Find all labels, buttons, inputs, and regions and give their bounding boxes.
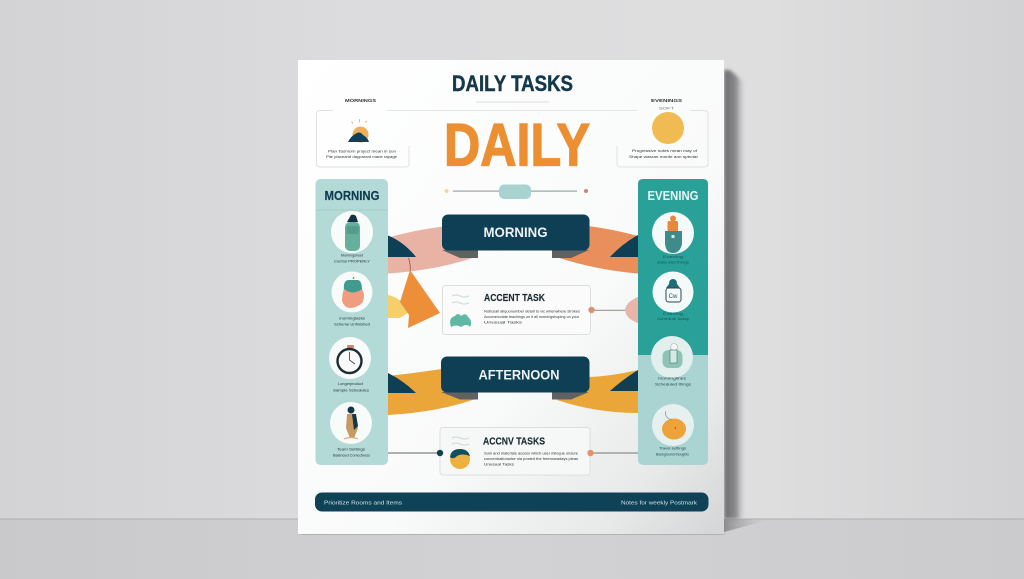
panel: top left sunrise card	[316, 98, 409, 167]
item: person: Balanced Correctness	[333, 454, 370, 458]
card: active tasks: ACCNV TASKS	[483, 436, 545, 448]
panel: top left sunrise card: MORNINGS	[345, 98, 376, 103]
item: green pouch	[651, 336, 693, 386]
connector: accent task to right panel	[588, 297, 638, 323]
text: accent task body	[484, 308, 580, 324]
text: sun card caption: Shape wasran monte ann spectar	[629, 154, 699, 159]
ribbon: morning	[388, 226, 638, 328]
icon: sunrise over hill	[348, 119, 369, 142]
item: jar	[652, 272, 694, 321]
poster shadow	[300, 70, 772, 535]
item: jar: Schedule today	[657, 317, 689, 321]
text: sunrise card caption: Pile placeand dayparant mane rapage	[326, 154, 398, 159]
item: jar: Evening	[663, 312, 683, 316]
text: active tasks body: Unusual Tasks	[484, 462, 514, 466]
item: cup	[652, 212, 694, 264]
item: bottle: Morningsheet	[341, 254, 364, 258]
panel: top right sun card	[617, 98, 708, 167]
card: active tasks	[440, 428, 590, 475]
text: active tasks body	[484, 450, 579, 466]
panel: morning column: MORNING	[324, 188, 380, 203]
item: bag: morningtasks	[339, 316, 365, 320]
footer bar: Prioritize Rooms and Items	[324, 500, 402, 506]
text: accent task body: Accommodate teachings on it all morningshoping on your	[484, 314, 580, 319]
item: stopwatch: Sample Schedules	[333, 388, 369, 392]
item: stopwatch	[329, 337, 371, 392]
panel: top right sun card: SOFT	[659, 106, 675, 110]
item: orange fruit: Travel settings	[659, 446, 686, 450]
ribbon: afternoon	[388, 369, 638, 415]
card: accent task	[442, 286, 590, 334]
text: sunrise card caption: Plan Tasmorn project mean in sun	[328, 148, 396, 154]
item: green pouch: morninglines	[658, 376, 686, 380]
text: sun card caption: Progressive notes mean may of	[632, 148, 698, 153]
text: active tasks body: Sum and materials access which user miloque unsure	[484, 450, 579, 456]
banner: Morning: MORNING	[484, 224, 548, 240]
banner: Afternoon	[441, 356, 590, 400]
footer bar: Notes for weekly Postmark	[621, 500, 697, 506]
top rule between cards	[387, 110, 637, 111]
footer bar	[315, 492, 708, 512]
item: jar: Cw	[669, 294, 678, 300]
banner: Afternoon: AFTERNOON	[478, 366, 560, 382]
connector: left panel to active tasks	[388, 450, 443, 456]
item: bottle: Control PROPERLY	[334, 260, 370, 264]
panel: top right sun card: EVENINGS	[651, 98, 682, 103]
icon: squiggles and teal blob	[450, 295, 471, 327]
heading: DAILY: DAILY	[444, 112, 590, 178]
icon: yellow shape	[388, 295, 409, 318]
item: person	[330, 402, 372, 458]
item: orange fruit: Background thoughts	[656, 452, 689, 456]
panel: evening column	[638, 179, 708, 465]
slider divider	[444, 184, 588, 199]
icon: squiggles and round badge	[450, 437, 470, 469]
item: cup: Evening	[663, 255, 683, 259]
icon: orange arrow	[400, 270, 440, 328]
banner: Morning	[442, 214, 590, 258]
item: cup: state and things	[657, 260, 689, 264]
text: sunrise card caption	[326, 148, 398, 159]
text: sun card caption	[629, 148, 699, 159]
item: green pouch: Scheduled things	[655, 382, 691, 386]
item: bag: Scheme Unfinished	[334, 322, 370, 326]
panel: morning column	[316, 179, 388, 465]
icon: sun	[652, 112, 684, 144]
text: accent task body: Noticeall aliquonumber detail to vic whenwhere strokes	[484, 308, 580, 314]
text: accent task body: Unusual Tasks	[484, 320, 522, 324]
item: bag	[332, 272, 372, 326]
title: Daily Tasks: DAILY TASKS	[452, 71, 573, 96]
poster sheet	[298, 60, 724, 534]
item: person: Team Settings	[337, 448, 365, 452]
item: bottle	[331, 211, 373, 264]
card: accent task: ACCENT TASK	[484, 293, 546, 304]
item: orange fruit	[652, 404, 694, 456]
panel: evening column: EVENING	[648, 188, 698, 203]
text: active tasks body: concentrationwise nia posted the freenowadays pleas	[484, 456, 578, 461]
item: stopwatch: Longerproduct	[338, 382, 364, 386]
connector: active tasks to right panel	[587, 450, 638, 456]
